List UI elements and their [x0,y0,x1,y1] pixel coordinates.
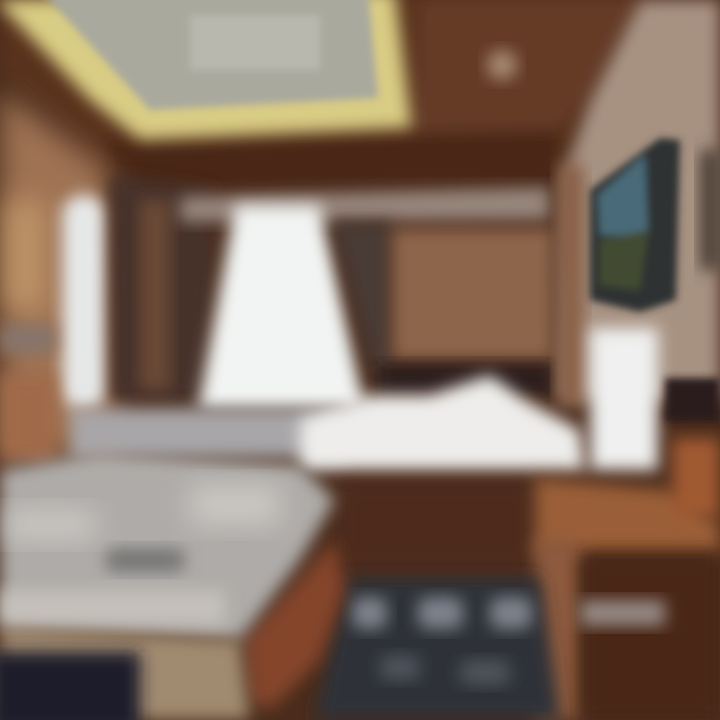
ceiling: wood and glowing panel [0,0,650,195]
left lower wall [0,375,55,460]
bed frame [338,482,533,572]
right wall [558,0,720,470]
curtains and window [110,175,550,410]
small frames on wall [700,150,720,270]
window sill and bed back [70,408,345,458]
wall painting [590,138,680,312]
bed [0,452,345,720]
headboard shadow [378,365,553,395]
left wall and window [0,90,115,460]
pillows [300,375,585,470]
bedside desk [535,438,720,720]
ceiling spotlight [487,50,517,80]
wall panel behind bed [392,228,554,360]
dark strip at right [665,378,720,422]
white side panel [590,328,658,470]
carpet [315,578,560,720]
